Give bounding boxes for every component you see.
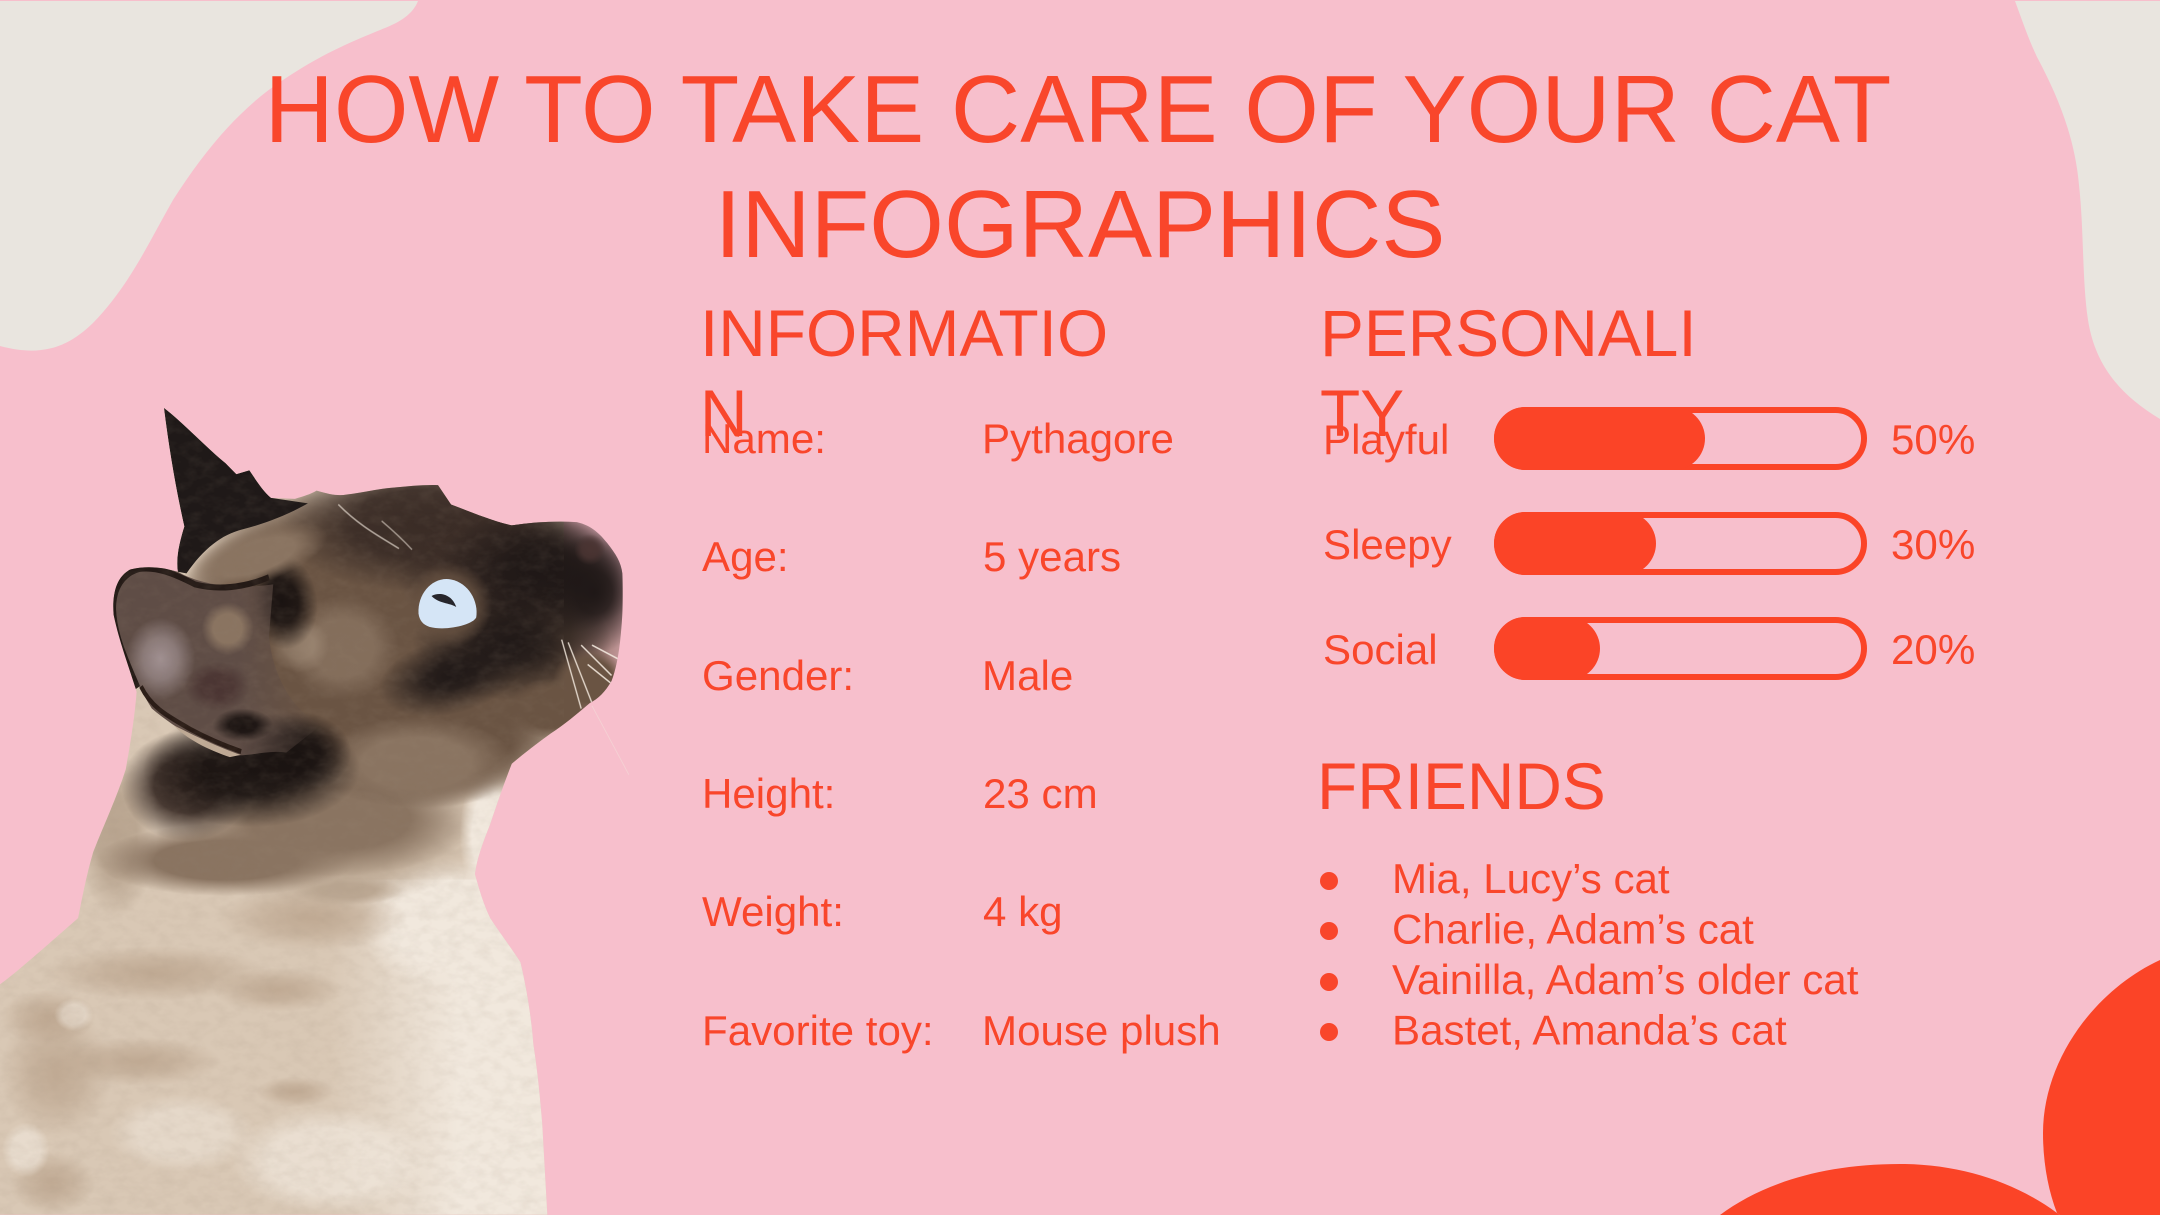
friends list — [1320, 855, 1859, 1054]
information table: Gender: — [702, 652, 854, 699]
information table: Pythagore — [982, 415, 1174, 462]
personality row: playful — [1323, 407, 1975, 470]
decorative blob: top left — [0, 1, 418, 351]
heading: information: N — [700, 376, 748, 450]
personality row: sleepy: 30% — [1891, 521, 1975, 568]
heading: personality: TY — [1320, 376, 1404, 450]
friends list: Charlie, Adam’s cat — [1392, 906, 1754, 952]
information table: Age: — [702, 533, 789, 580]
heading: friends: FRIENDS — [1317, 749, 1606, 823]
friends list: Mia, Lucy’s cat — [1392, 855, 1670, 902]
information table — [702, 415, 1221, 1054]
friends list: Bastet, Amanda’s cat — [1392, 1006, 1787, 1054]
personality row: social: Social — [1323, 626, 1438, 673]
heading: information: INFORMATIO — [700, 296, 1108, 370]
personality row: sleepy: Sleepy — [1323, 521, 1452, 568]
decorative blobs: bottom right — [1720, 960, 2160, 1215]
personality row: social — [1323, 617, 1975, 680]
information table: 4 kg — [983, 888, 1063, 935]
information table: 5 years — [983, 533, 1121, 580]
information table: Mouse plush — [982, 1007, 1221, 1054]
title: HOW TO TAKE CARE OF YOUR CAT — [265, 56, 1891, 163]
heading: information — [700, 296, 1108, 450]
title: INFOGRAPHICS — [715, 171, 1445, 278]
information table: Male — [982, 652, 1073, 699]
friends list: Vainilla, Adam’s older cat — [1392, 956, 1859, 1003]
information table: Height: — [702, 770, 835, 817]
personality row: social: 20% — [1891, 626, 1975, 673]
heading: personality: PERSONALI — [1320, 296, 1697, 370]
cat illustration — [0, 408, 629, 1215]
personality row: playful: 50% — [1891, 416, 1975, 463]
heading: personality — [1320, 296, 1697, 450]
information table: Name: — [702, 415, 826, 462]
information table: Favorite toy: — [702, 1007, 934, 1054]
information table: Weight: — [702, 888, 844, 935]
personality row: sleepy — [1323, 512, 1975, 575]
decorative blob: top right — [2015, 1, 2160, 419]
information table: 23 cm — [983, 770, 1098, 817]
title — [265, 56, 1891, 278]
personality row: playful: Playful — [1323, 416, 1449, 463]
